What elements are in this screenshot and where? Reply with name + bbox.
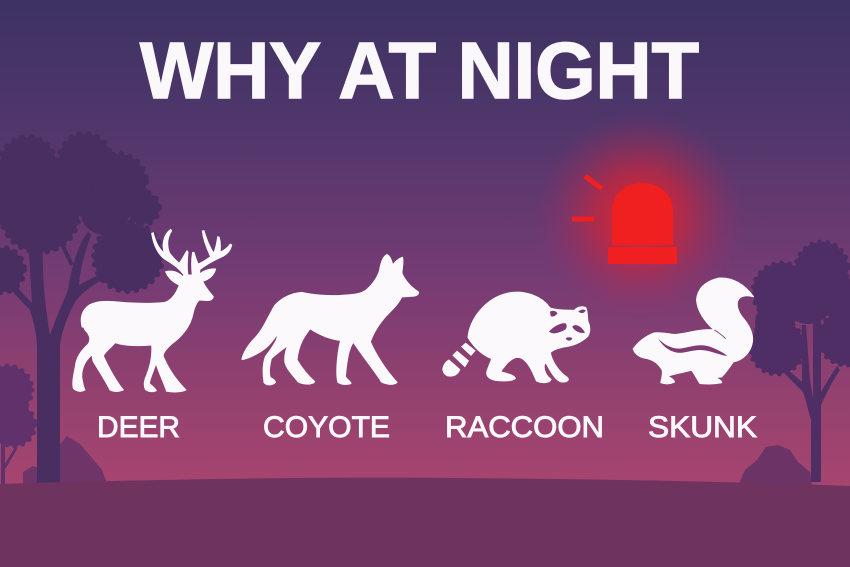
label: raccoon: RACCOON bbox=[445, 411, 604, 444]
icon: deer bbox=[73, 229, 232, 392]
bush, left bbox=[23, 436, 108, 486]
icon: skunk bbox=[633, 278, 753, 384]
bush, right bbox=[738, 445, 812, 486]
raccoon face markings bbox=[549, 309, 586, 341]
icon: raccoon bbox=[442, 292, 589, 382]
tree silhouette, right bbox=[750, 242, 850, 482]
label: deer: DEER bbox=[97, 411, 180, 444]
ground hill bbox=[0, 478, 850, 567]
icon: coyote bbox=[242, 255, 418, 385]
small background tree, left bbox=[0, 366, 35, 485]
tree silhouette, left bbox=[0, 134, 162, 490]
label: coyote: COYOTE bbox=[263, 411, 390, 444]
label: skunk: SKUNK bbox=[648, 411, 757, 444]
title: WHY AT NIGHT bbox=[140, 26, 699, 115]
icon: red emergency beacon with glow bbox=[535, 110, 745, 320]
